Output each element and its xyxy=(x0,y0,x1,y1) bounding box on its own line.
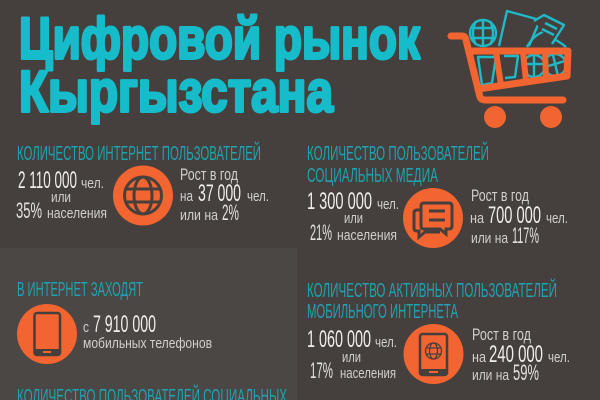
growth stats xyxy=(180,166,269,225)
users stats: чел. xyxy=(375,334,397,351)
icon: cart frame xyxy=(451,36,568,100)
users stats: 1 300 000 xyxy=(307,188,372,215)
icon: globe xyxy=(113,166,173,226)
growth stats xyxy=(470,187,568,248)
users stats: 2 110 000 xyxy=(18,167,77,194)
growth stats: чел. xyxy=(548,349,570,366)
growth stats: Рост в год xyxy=(180,166,238,184)
growth stats xyxy=(472,326,570,385)
heading: В ИНТЕРНЕТ ЗАХОДЯТ xyxy=(17,278,143,301)
phones stat: мобильных телефонов xyxy=(83,335,212,352)
growth stats: или на xyxy=(471,230,509,247)
growth stats: 240 000 xyxy=(489,341,543,368)
title xyxy=(19,6,421,124)
icon: speech bubbles xyxy=(403,188,463,248)
growth stats: на xyxy=(180,188,194,205)
growth stats: чел. xyxy=(247,188,269,205)
heading: СОЦИАЛЬНЫХ МЕДИА xyxy=(307,164,438,187)
panel: internet users xyxy=(16,141,269,226)
title: Кыргызстана xyxy=(19,60,334,124)
heading: КОЛИЧЕСТВО ИНТЕРНЕТ ПОЛЬЗОВАТЕЛЕЙ xyxy=(17,141,261,165)
users stats: чел. xyxy=(377,196,399,213)
growth stats: Рост в год xyxy=(472,326,531,344)
users stats xyxy=(16,167,107,223)
users stats: 1 060 000 xyxy=(307,326,371,353)
growth stats: чел. xyxy=(546,210,568,227)
users stats: или xyxy=(342,349,361,366)
users stats: чел. xyxy=(81,175,104,192)
users stats xyxy=(307,188,399,245)
phones stat: 7 910 000 xyxy=(93,311,156,338)
icon: phone with globe xyxy=(404,324,464,384)
icon: cart contents xyxy=(470,11,566,85)
users stats: 21% xyxy=(310,220,332,245)
users stats xyxy=(307,326,397,383)
heading xyxy=(307,141,489,187)
icon: cart wheels xyxy=(484,106,562,128)
users stats: населения xyxy=(47,205,107,222)
icon: shopping cart with devices xyxy=(451,11,568,128)
panel: social media users xyxy=(307,141,568,248)
phones stat: с xyxy=(83,319,89,336)
growth stats: 700 000 xyxy=(488,202,541,229)
growth stats: или на xyxy=(180,207,219,224)
growth stats: Рост в год xyxy=(471,187,529,205)
panel: mobile internet users xyxy=(307,278,570,385)
users stats: 35% xyxy=(16,198,42,223)
growth stats: на xyxy=(472,349,487,366)
heading xyxy=(307,278,557,323)
growth stats: или на xyxy=(472,367,510,384)
users stats: 17% xyxy=(310,358,333,383)
growth stats: 2% xyxy=(222,200,239,225)
users stats: или xyxy=(344,210,363,227)
users stats: населения xyxy=(337,227,397,244)
growth stats: 117% xyxy=(512,223,539,248)
users stats: или xyxy=(51,189,71,206)
growth stats: 59% xyxy=(513,360,539,385)
heading: МОБИЛЬНОГО ИНТЕРНЕТА xyxy=(307,300,458,323)
growth stats: 37 000 xyxy=(198,180,241,207)
panel: internet access devices xyxy=(17,278,287,400)
icon: mobile phone xyxy=(17,304,77,364)
growth stats: на xyxy=(470,210,485,227)
phones stat xyxy=(83,311,212,352)
title: Цифровой рынок xyxy=(19,6,421,72)
users stats: населения xyxy=(340,365,396,382)
